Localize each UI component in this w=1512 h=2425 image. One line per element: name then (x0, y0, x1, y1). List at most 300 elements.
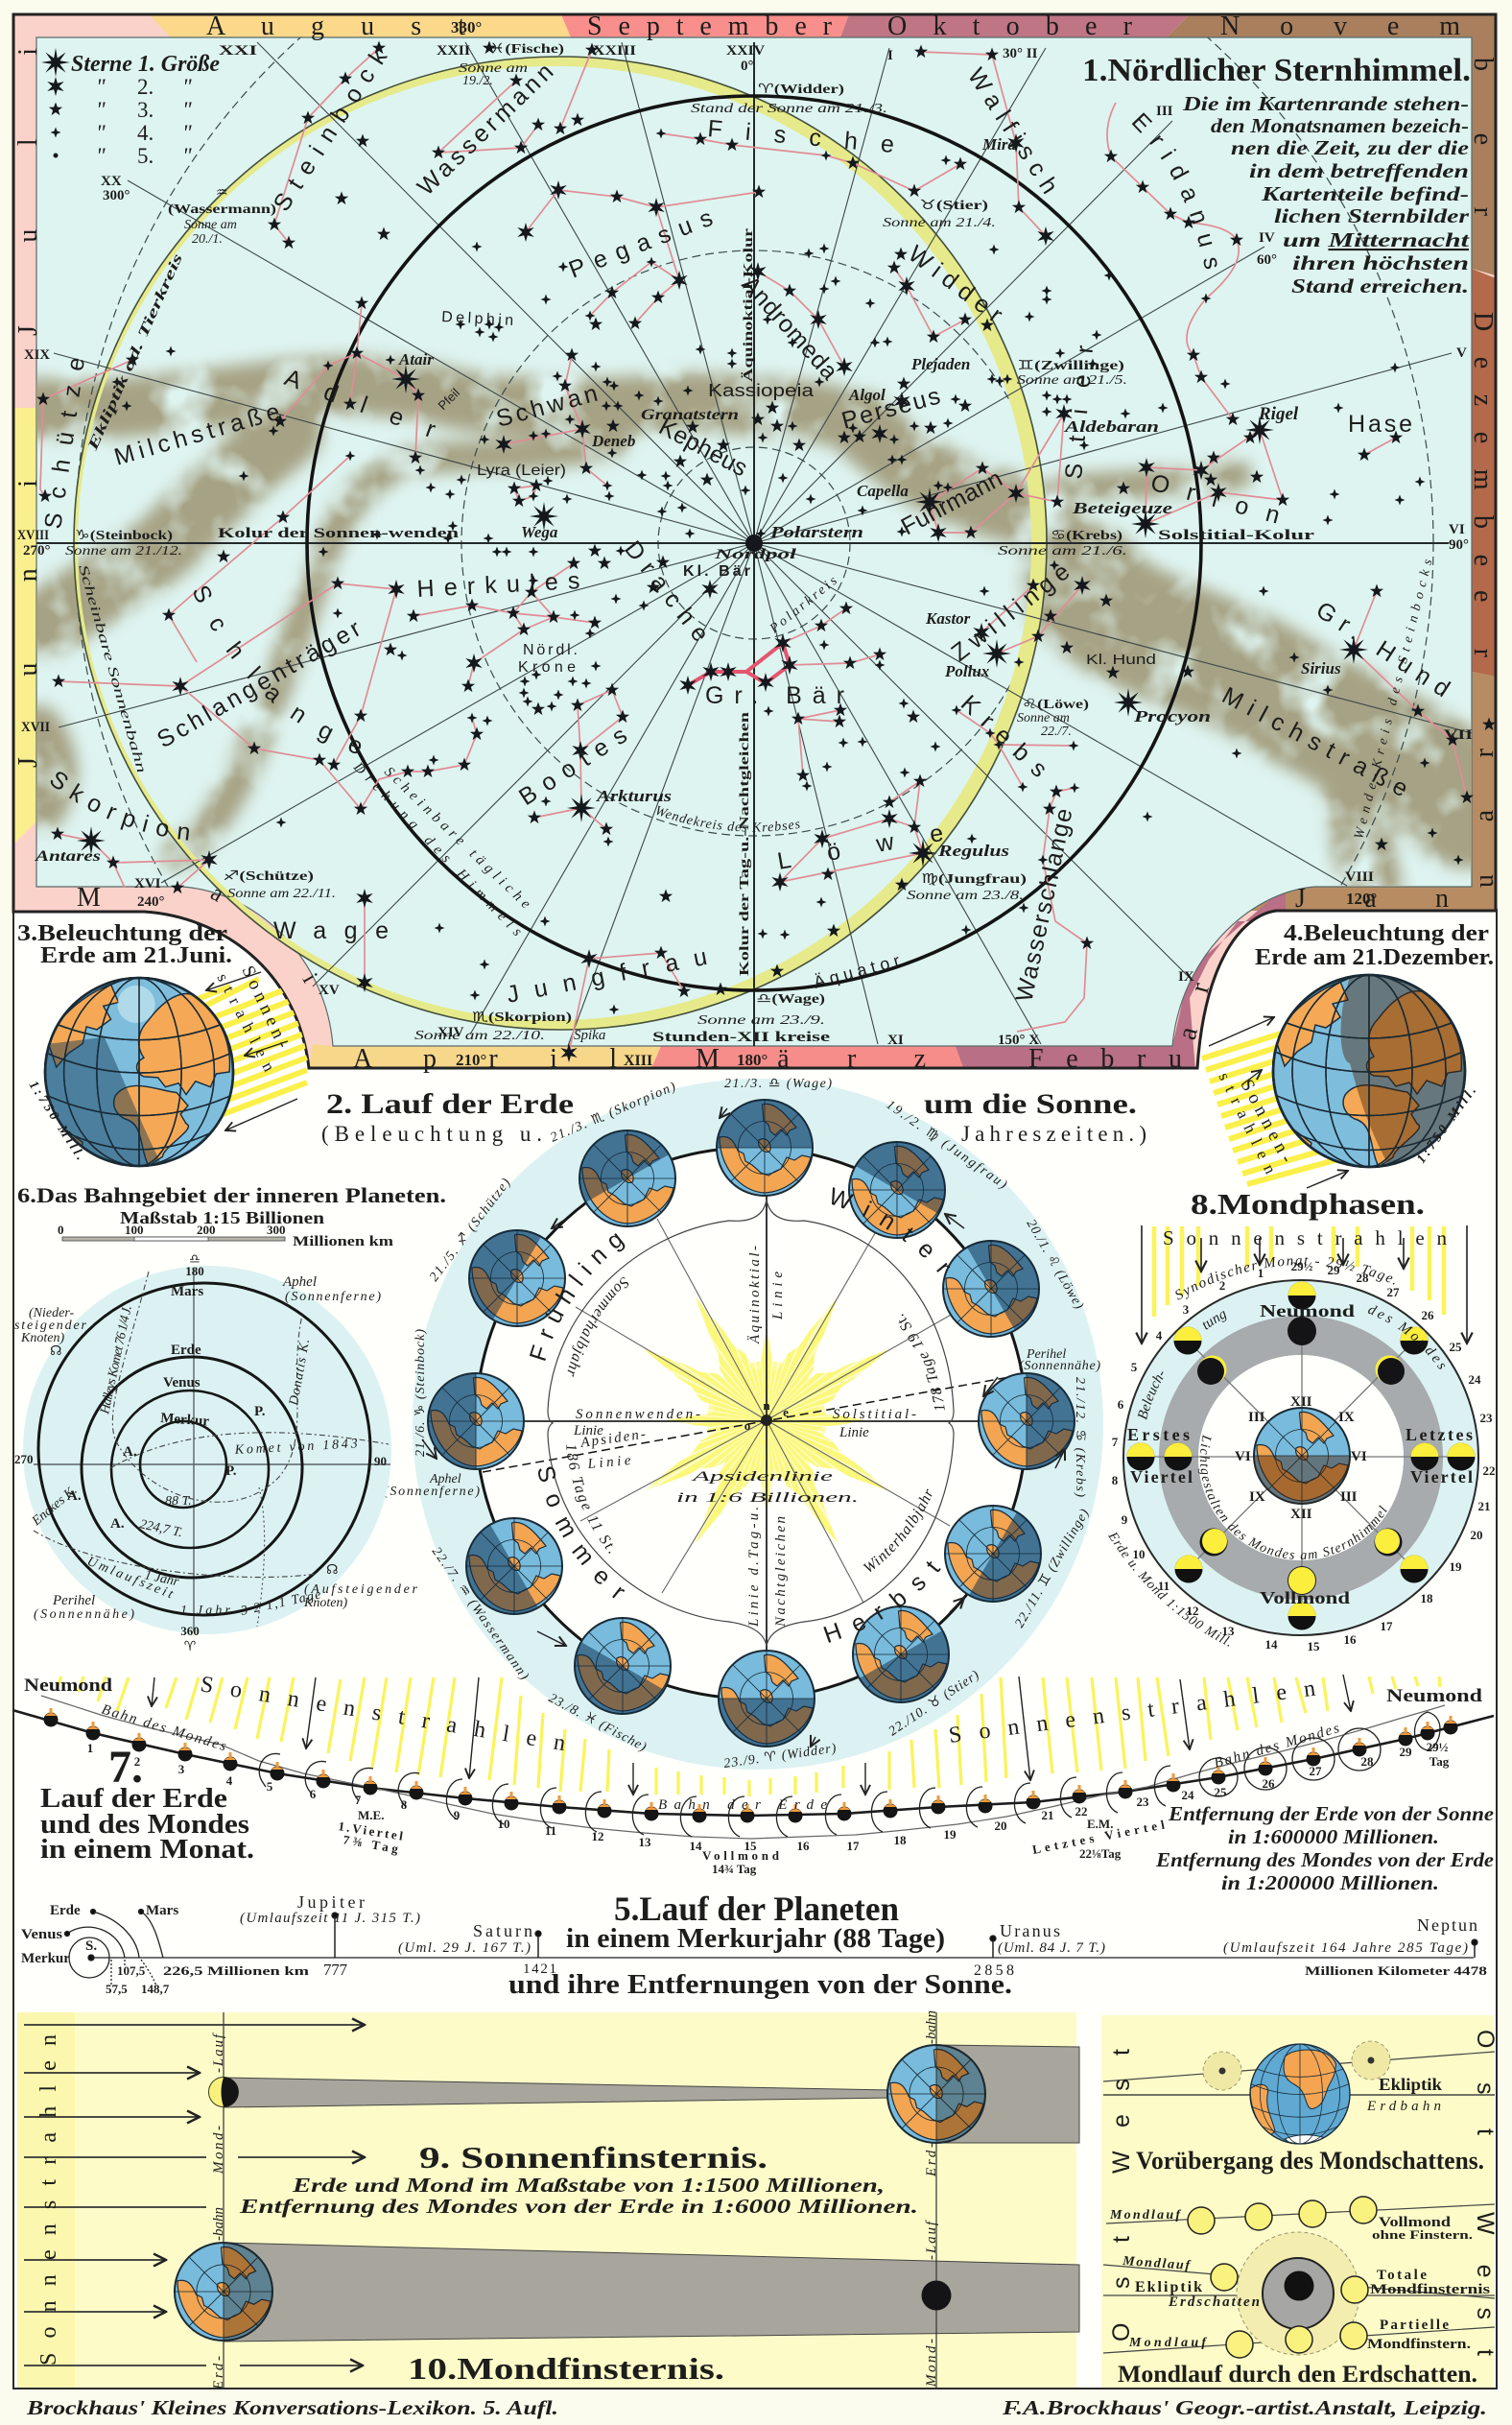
day numbers: 10 (497, 1817, 510, 1831)
month names on the band: u a r (1470, 748, 1500, 888)
hour labels and zodiac sign notes: 19./2. (462, 74, 493, 88)
month names on the band: e r (1468, 590, 1498, 658)
star magnitude legend: " (96, 75, 106, 99)
phase labels: VI (1235, 1449, 1251, 1464)
earth showing Africa (1250, 2044, 1350, 2144)
hour labels and zodiac sign notes: Sonne am 21./4. (883, 216, 996, 230)
orbit labels: Mond- (924, 2339, 939, 2388)
day numbers: 5 (1131, 1360, 1138, 1374)
constellation names: Milchstraße (111, 398, 283, 471)
constellation names: Schwan (493, 380, 601, 433)
season names (530, 1187, 950, 1643)
line labels inside orbit: Linie (770, 1272, 786, 1320)
star names: Nordpol (713, 547, 797, 562)
twelve earth positions (428, 1100, 1075, 1747)
orbit labels: Enckes K. (29, 1484, 80, 1530)
day numbers: 9 (1122, 1512, 1128, 1527)
star names: Mira (981, 135, 1016, 154)
day numbers: 18 (1420, 1591, 1433, 1605)
hour labels and zodiac sign notes: VI (1449, 522, 1465, 537)
hour labels and zodiac sign notes: XVIII (17, 528, 49, 543)
line labels inside orbit: Linie (586, 1453, 632, 1472)
day numbers: 28 (1357, 1271, 1369, 1285)
constellation names: Eridanus (1132, 112, 1217, 269)
heading 2: Jahreszeiten.) (961, 1122, 1146, 1146)
map explanation text: den Monatsnamen bezeich- (1211, 114, 1469, 137)
orbit labels (211, 2010, 939, 2390)
constellation names: Skorpion (50, 772, 189, 841)
hour labels and zodiac sign notes: ♋(Krebs) (1051, 529, 1122, 543)
phase labels: XII (1290, 1394, 1312, 1410)
spokes (1141, 1296, 1461, 1616)
orbit labels: 88 T. (165, 1494, 192, 1509)
hour labels and zodiac sign notes: IX (1178, 969, 1194, 985)
yellow background (1101, 2015, 1494, 2388)
eclipse labels: Mondfinstern. (1367, 2337, 1471, 2352)
day numbers: 18 (894, 1833, 907, 1847)
hour labels and zodiac sign notes: Sonne am (184, 218, 237, 232)
hour labels and zodiac sign notes: ♑(Steinbock) (75, 529, 173, 543)
hour labels and zodiac sign notes: ♐(Schütze) (223, 869, 314, 884)
date and zodiac labels around orbit: 23./9. ♈ (Widder) (722, 1742, 838, 1771)
sun symbol: n (763, 1398, 770, 1413)
constellation names: Krebs (956, 690, 1052, 783)
season names: Herbst (823, 1561, 941, 1643)
curved labels (1108, 1257, 1445, 1647)
map explanation text: Stand erreichen. (1291, 274, 1469, 297)
constellation names: Delphin (441, 309, 514, 329)
ecliptic ring (74, 57, 1047, 1030)
month names on the band: 180° (737, 1051, 768, 1069)
constellation names: Schlangenträger (153, 615, 366, 753)
day numbers: 20 (994, 1819, 1007, 1833)
hour labels and zodiac sign notes: Spika (574, 1028, 605, 1043)
day numbers: 4 (1156, 1328, 1163, 1343)
day numbers: 29 (1399, 1745, 1412, 1759)
sun rays burst (632, 1286, 901, 1555)
phase labels: Letztes (1406, 1425, 1473, 1444)
eclipse labels: Erdschatten (1168, 2294, 1260, 2310)
hour labels and zodiac sign notes: Stand der Sonne am 21./3. (691, 102, 887, 116)
orbit labels: Umlaufszeit (85, 1555, 176, 1603)
hour labels and zodiac sign notes: Äquinoktial-Kolur (741, 228, 756, 382)
day numbers: 22 (1483, 1463, 1495, 1478)
phase labels: III (1340, 1489, 1358, 1505)
hour labels and zodiac sign notes: Stunden-XII kreise (652, 1030, 831, 1045)
star magnitude legend: " (182, 144, 192, 168)
heading 2: 2. Lauf der Erde (326, 1088, 574, 1120)
phase notes: Letztes Viertel (1031, 1817, 1166, 1857)
globe December (1273, 975, 1465, 1167)
phase notes: 22⅛Tag (1079, 1846, 1122, 1861)
black sun arrows (152, 1675, 1351, 1795)
scale label: 1:750 Mill. (26, 1079, 87, 1163)
hour labels and zodiac sign notes: Sonne am 23./9. (697, 1013, 825, 1028)
planet labels: 777 (323, 1961, 347, 1979)
sun symbol: o (744, 1418, 750, 1433)
hour labels and zodiac sign notes: XX (101, 174, 122, 189)
eclipse labels: Ekliptik (1135, 2279, 1202, 2295)
date and zodiac labels around orbit: 21./6. ♑ (Steinbock) (413, 1329, 428, 1457)
phase notes: 1.Viertel (338, 1819, 404, 1843)
phase labels: III (1248, 1410, 1265, 1425)
day numbers: 29½ (1427, 1740, 1449, 1754)
day numbers: 28 (1360, 1754, 1374, 1769)
line labels inside orbit: Nachtgleichen (773, 1516, 789, 1628)
day numbers: 23 (1479, 1411, 1493, 1425)
sun arrows (1142, 1225, 1467, 1343)
distance axis (91, 1957, 1474, 1959)
orbit labels: Perihel (52, 1593, 95, 1608)
month names on the band: J u n i (13, 480, 43, 768)
path labels: Bahn des Mondes (100, 1702, 228, 1754)
panel 4: illumination of the earth on 21 December (1202, 921, 1494, 1188)
month names on the band: J a n (1295, 884, 1449, 914)
constellation names: Fuhrmann (897, 465, 1006, 540)
west and east labels: W e s t (1472, 2212, 1499, 2356)
moon orbit disk (1123, 1280, 1478, 1635)
day numbers: 14 (1264, 1637, 1278, 1652)
month names on the band: 120° (1346, 890, 1377, 908)
orbit labels: 270 (14, 1452, 33, 1466)
month names on the band: i (297, 969, 322, 987)
month names on the band: M ä r z (696, 1044, 926, 1074)
sun ray labels: Sonnen- (237, 963, 293, 1051)
curved labels: Lichtgestalten des Mondes am Sternhimmel (1197, 1434, 1387, 1560)
hour labels and zodiac sign notes: Scheinbare Sonnenbahn (75, 563, 149, 774)
season names: Frühling (530, 1233, 626, 1361)
day numbers: 3 (178, 1762, 185, 1776)
heading 7: 7. (108, 1742, 143, 1793)
hour labels and zodiac sign notes: IV (1259, 230, 1275, 246)
constellation names: Jungfrau (505, 943, 709, 1009)
orbit labels: Halleys Komet 76 1/4 J. (98, 1304, 135, 1416)
orbit labels: Aphel (282, 1274, 317, 1290)
hour labels and zodiac sign notes: ♎(Wage) (756, 992, 825, 1007)
heading 7 (40, 1742, 254, 1865)
star names: Pollux (944, 662, 990, 680)
star magnitude legend: 5. (137, 144, 154, 168)
map frame (13, 14, 1496, 1068)
phase labels: Viertel (1130, 1467, 1193, 1486)
hour labels and zodiac sign notes: XXII (437, 43, 470, 59)
star names: Deneb (591, 432, 635, 450)
planet labels: (Umlaufszeit 11 J. 315 T.) (240, 1911, 420, 1926)
star magnitude legend: " (96, 98, 106, 122)
star names: Polarstern (769, 523, 863, 541)
orbit labels: ☊ (326, 1563, 338, 1578)
planet labels: Venus (21, 1927, 62, 1942)
phase notes: E.M. (1087, 1817, 1113, 1831)
orbit labels: ♈ (184, 1640, 197, 1654)
scale bar: 200 (197, 1223, 215, 1237)
moon path (41, 1696, 1445, 1839)
month names on the band: a r (1172, 979, 1216, 1043)
panel 2: course of the earth around the sun (321, 1077, 1146, 1771)
west and east labels: O s t (1108, 2236, 1135, 2342)
sun rays label: S o n n e n s t r a h l e n (36, 2034, 61, 2366)
heading 5: und ihre Entfernungen von der Sonne. (508, 1969, 1012, 2000)
day numbers: 7 (355, 1793, 362, 1807)
distance notes (1155, 1802, 1494, 1894)
path labels: Bahn des Mondes (1213, 1721, 1341, 1771)
phase notes: 7⅜ Tag (342, 1832, 400, 1856)
day numbers: 6 (1118, 1397, 1124, 1412)
scale text: Erde und Mond im Maßstabe von 1:1500 Millionen, (292, 2174, 885, 2197)
constellation names: Lyra (Leier) (477, 463, 566, 479)
constellation names: Widder (903, 240, 1007, 328)
distance notes: Entfernung des Mondes von der Erde (1155, 1848, 1494, 1871)
planet labels (21, 1892, 1488, 1996)
line labels inside orbit: in 1:6 Billionen. (676, 1490, 859, 1506)
constellation names: Kepheus (654, 414, 752, 482)
heading 10: 10.Mondfinsternis. (408, 2351, 724, 2386)
day numbers (87, 1740, 1450, 1853)
hour labels and zodiac sign notes: Sonne am 21./5. (1017, 373, 1127, 388)
day numbers: 9 (454, 1808, 461, 1822)
panel 8: phases of the moon (1108, 1187, 1495, 1653)
line labels inside orbit: Äquinoktial- (746, 1246, 763, 1344)
orbit vertical lines (224, 2012, 936, 2389)
star names: Beteigeuze (1072, 499, 1173, 517)
star names: Kastor (925, 609, 971, 628)
yellow sun rays (58, 1676, 1440, 1796)
labels transit: Vorübergang des Mondschattens. (1136, 2147, 1484, 2175)
hour labels and zodiac sign notes: Sonne am 22./10. (414, 1029, 545, 1043)
orbit labels: (Sonnenferne) (285, 1290, 381, 1304)
panel: white lower page area (13, 910, 1497, 2389)
orbit labels: ♎ (189, 1251, 201, 1266)
heading 5 (508, 1890, 1012, 2000)
star names: Aldebaran (1064, 417, 1159, 436)
day numbers: 29 (1328, 1263, 1340, 1277)
hour labels and zodiac sign notes: ♏(Skorpion) (472, 1010, 572, 1025)
planet labels: 57,5 (106, 1982, 128, 1996)
hour labels and zodiac sign notes: ♒ (216, 186, 228, 201)
scale label: 1:750 Mill. (1414, 1084, 1479, 1166)
line labels inside orbit: Linie d.Tag-u. (746, 1507, 762, 1628)
date and zodiac labels around orbit: 22./7. ♒ (Wassermann) (429, 1545, 532, 1683)
sun glow strip (17, 2012, 75, 2389)
orbit labels: -bahn (211, 2207, 226, 2241)
star magnitude legend: " (96, 144, 106, 168)
map explanation text: Kartenteile befind- (1261, 182, 1469, 205)
orbit labels: A. (110, 1516, 125, 1532)
hour labels and zodiac sign notes: Scheinbare tägliche (381, 764, 533, 913)
orbit labels: Erde (171, 1343, 201, 1358)
orbit labels: 1 Jahr (180, 1604, 231, 1618)
globe June (45, 978, 233, 1166)
hour labels and zodiac sign notes: ♉(Stier) (919, 199, 988, 213)
map title: 1.Nördlicher Sternhimmel. (1082, 53, 1471, 88)
hour labels and zodiac sign notes: 90° (1449, 537, 1469, 553)
constellation names: Gr. Bär (705, 682, 844, 709)
date and zodiac labels around orbit: 21./12. ♋ (Krebs) (1073, 1377, 1087, 1497)
hour labels and zodiac sign notes: Kolur der Sonnen-wenden (218, 526, 460, 541)
moon shadow cone (224, 2078, 892, 2107)
scale bar: 100 (125, 1223, 144, 1237)
orbit labels: ☊ (50, 1344, 61, 1359)
day numbers: 25 (1215, 1785, 1227, 1799)
orbit labels: (Aufsteigender (304, 1582, 418, 1597)
constellation names: Adler (281, 364, 439, 443)
equator circle (307, 96, 1201, 990)
neumond labels: Neumond (24, 1676, 112, 1696)
heading 8: 8.Mondphasen. (1191, 1187, 1425, 1221)
planet labels: (Umlaufszeit 164 Jahre 285 Tage) (1223, 1940, 1468, 1956)
map explanation text: ihren höchsten (1292, 251, 1469, 274)
eclipse labels (1109, 2208, 1490, 2388)
hour labels and zodiac sign notes (17, 42, 1473, 1048)
moon lunar eclipse (921, 2280, 952, 2311)
day numbers: 3 (1183, 1302, 1190, 1317)
star magnitude legend: " (182, 75, 192, 99)
earth lunar eclipse (175, 2243, 272, 2341)
day numbers: 21 (1042, 1808, 1053, 1822)
orbit labels: 90 (374, 1454, 387, 1468)
orbit labels: 180 (185, 1264, 204, 1278)
date and zodiac labels around orbit: (Sonnennähe) (1019, 1359, 1100, 1373)
hour labels and zodiac sign notes: Sonne am (1017, 711, 1070, 725)
radial and axis lines (483, 1195, 1020, 1651)
day numbers: 22 (1075, 1804, 1088, 1819)
orbit labels: Mond- (211, 2126, 226, 2175)
planet orbits (38, 1283, 370, 1615)
month names on the band: A u g u s t (206, 12, 465, 41)
scale text (239, 2174, 918, 2218)
month names on the band: M (77, 883, 101, 913)
phase labels (1127, 1301, 1473, 1607)
heading 4: 4.Beleuchtung der (1284, 921, 1489, 946)
sun stripes (1202, 1034, 1338, 1184)
panel: moon shadow transit and lunar eclipse diagram (1101, 2015, 1499, 2388)
hour labels and zodiac sign notes: Sonne am (459, 61, 528, 76)
orbit labels: A. (123, 1444, 137, 1460)
hour labels and zodiac sign notes: XIX (24, 347, 50, 363)
sun ray labels: Sonnen- (1237, 1076, 1297, 1166)
star magnitude legend: 2. (137, 75, 154, 99)
constellation names: Walfisch (962, 63, 1063, 199)
day numbers: 13 (639, 1835, 651, 1849)
day numbers: 5 (267, 1779, 273, 1794)
hour labels and zodiac sign notes: Solstitial-Kolur (1158, 528, 1315, 543)
west and east labels: O s t (1472, 2030, 1499, 2135)
constellation names: Löwe (775, 820, 945, 875)
central earth (1254, 1408, 1350, 1504)
phase notes (338, 1808, 1166, 1876)
hour labels and zodiac sign notes: 0° (741, 59, 754, 74)
hour labels and zodiac sign notes: Äquator (812, 951, 902, 992)
day numbers: 13 (1222, 1624, 1235, 1638)
constellation names: Herkules (416, 567, 580, 603)
day numbers: 2 (1219, 1278, 1225, 1293)
hour labels and zodiac sign notes: Sonne am 23./8. (907, 889, 1024, 903)
hour labels and zodiac sign notes: VII (1444, 727, 1473, 743)
eclipse labels: Vollmond (1379, 2215, 1452, 2230)
panel 1: northern star map (12, 12, 1500, 1074)
labels transit: Erdbahn (1366, 2099, 1441, 2114)
hour labels and zodiac sign notes: VIII (1345, 869, 1374, 885)
constellation names: Steinbock (269, 44, 393, 216)
panel 2 background disk (413, 1079, 1103, 1770)
half-year arcs text: 186 Tage 11 St. (566, 1445, 613, 1554)
season boundary curves (548, 1200, 954, 1646)
scale text: Entfernung des Mondes von der Erde in 1:6000 Millionen. (239, 2195, 918, 2218)
orbit labels: Merkur (160, 1411, 210, 1430)
blue background disk (23, 1266, 391, 1634)
panel 5: planets in one mercury year (21, 1890, 1488, 2000)
star magnitude legend: " (182, 121, 192, 145)
hour labels and zodiac sign notes: ♍(Jungfrau) (921, 872, 1027, 887)
ecliptic and moon lines (1103, 2052, 1495, 2353)
planet labels: Erde (50, 1903, 81, 1918)
month names on the band: a (206, 881, 228, 908)
date and zodiac labels around orbit: 20./1. ♌ (Löwe) (1024, 1217, 1086, 1312)
comet orbits (34, 1272, 389, 1627)
star field (36, 40, 1496, 1062)
yellow moons (1188, 2197, 1377, 2358)
orbit labels: Venus (163, 1375, 201, 1391)
constellation names: Kl. Hund (1086, 652, 1156, 668)
phase labels: IX (1249, 1489, 1265, 1505)
eclipse labels: Mondlauf (1109, 2208, 1181, 2223)
constellation names: Krone (518, 659, 576, 676)
star names: Wega (521, 523, 558, 541)
month names on the band: S e p t e m b e r (587, 12, 833, 41)
planet labels: Millionen Kilometer 4478 (1305, 1963, 1488, 1978)
heading 2 (321, 1088, 1146, 1146)
phase notes: 14¾ Tag (712, 1862, 757, 1876)
month names on the band: XIII (624, 1053, 652, 1069)
planet labels: Neptun (1417, 1915, 1477, 1935)
hour labels and zodiac sign notes: Sonne am 22./11. (227, 887, 336, 901)
month names on the band: 330° (451, 18, 482, 36)
star magnitude legend: Sterne 1. Größe (71, 52, 220, 77)
star names: Algol (848, 386, 886, 404)
sun symbol: e (783, 1405, 789, 1419)
moon loops (259, 1712, 1440, 1837)
hour labels and zodiac sign notes: Kolur der Tag-u.-Nachtgleichen (738, 712, 752, 976)
publisher footer (26, 2396, 1487, 2419)
distance notes: Entfernung der Erde von der Sonne (1168, 1802, 1494, 1825)
hour labels and zodiac sign notes: XVII (21, 720, 50, 735)
planet labels: (Uml. 84 J. 7 T.) (998, 1940, 1105, 1956)
orbit labels: Komet von 1843 (233, 1437, 358, 1458)
day numbers: 16 (796, 1839, 810, 1853)
line labels inside orbit: Apsiden- (579, 1427, 647, 1451)
eclipse labels: Mondfinsternis (1370, 2282, 1490, 2297)
sun ray label: strahlen (213, 970, 278, 1075)
day numbers: 14 (689, 1839, 702, 1853)
constellation names: F i s c h e (706, 115, 895, 158)
day numbers: 15 (744, 1839, 757, 1853)
phase labels: Erstes (1127, 1425, 1190, 1444)
hour labels and zodiac sign notes: 30° II (1003, 46, 1038, 61)
day numbers: 11 (545, 1823, 556, 1838)
constellation names: Schlange (194, 585, 361, 754)
hour labels and zodiac sign notes: Polarkreis (767, 574, 840, 637)
orbit labels: A. (67, 1488, 82, 1504)
orbit labels: 1 Jahr (143, 1568, 180, 1590)
eclipse labels: Mondlauf (1128, 2336, 1207, 2350)
sun stripes (197, 976, 308, 1117)
hour labels and zodiac sign notes: ♌(Löwe) (1022, 698, 1089, 712)
star names (35, 135, 1341, 865)
planet labels: Mars (146, 1903, 178, 1918)
constellation names: Schütze (39, 356, 90, 531)
constellation names: Wage (273, 917, 389, 944)
pole star burst (745, 535, 763, 552)
